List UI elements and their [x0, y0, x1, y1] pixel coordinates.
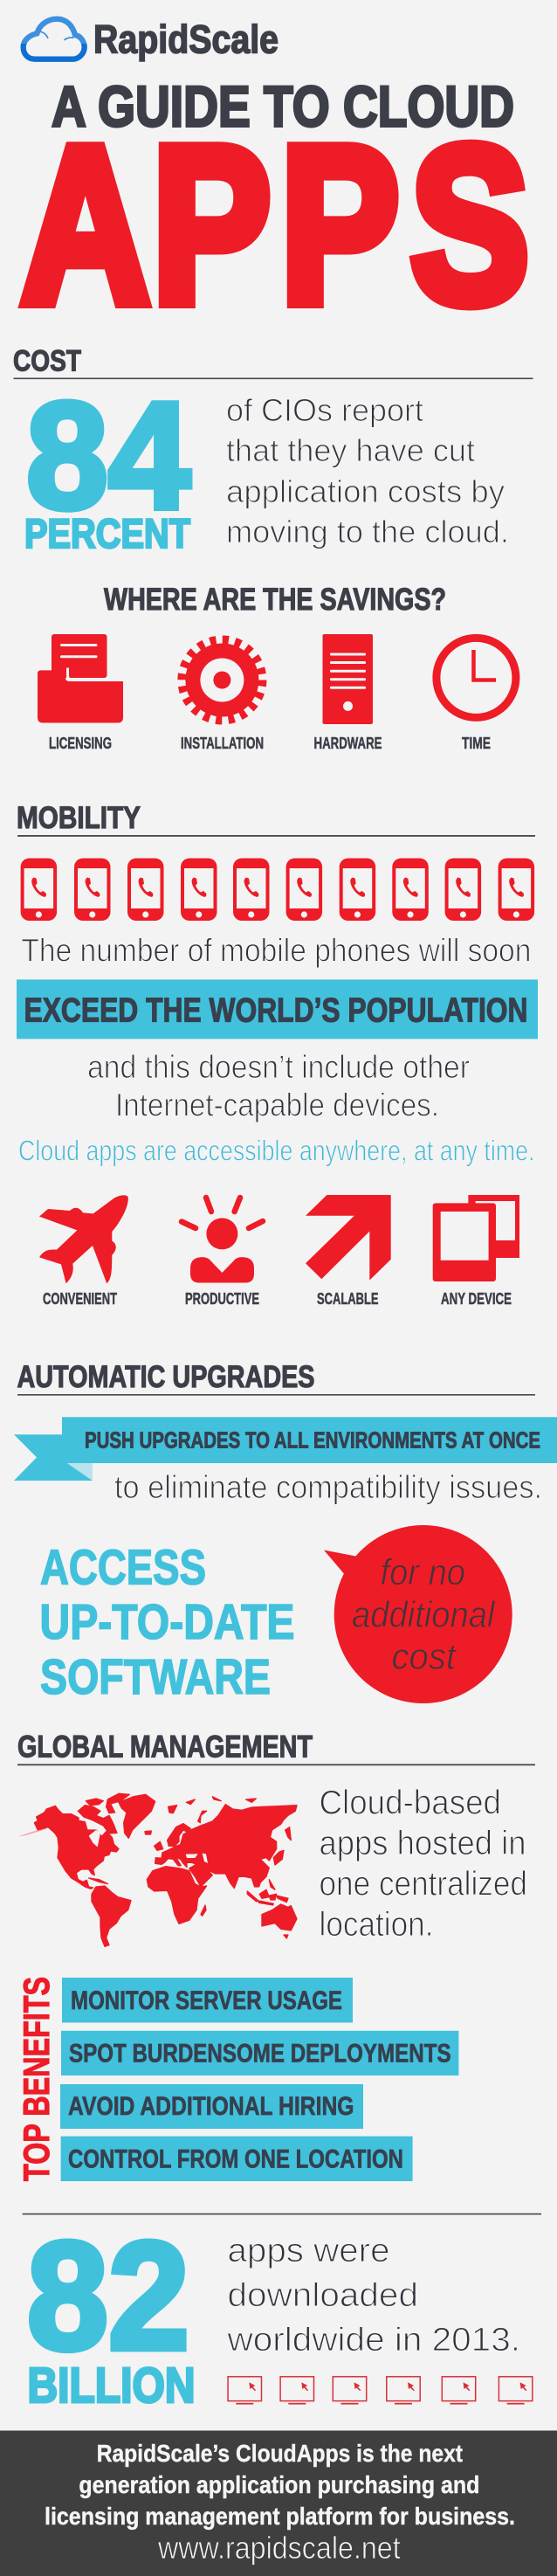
icon: clock	[437, 638, 516, 717]
heading: where are the savings: WHERE ARE THE SAVINGS?	[104, 583, 446, 617]
monitor icon row	[228, 2377, 533, 2405]
text: apps downloaded: worldwide in 2013.	[226, 2322, 520, 2358]
benefit: control from one location	[61, 2137, 413, 2181]
title: APPS: APPS	[21, 100, 529, 349]
callout: access up-to-date software: ACCESS	[40, 1539, 206, 1595]
text: apps downloaded: downloaded	[227, 2277, 418, 2314]
section heading: mobility: MOBILITY	[17, 801, 141, 835]
text block: CIO cost cuts: moving to the cloud.	[226, 514, 509, 549]
label: licensing: LICENSING	[49, 735, 112, 752]
section heading: global management: GLOBAL MANAGEMENT	[17, 1730, 313, 1765]
icon: cloud	[24, 19, 85, 59]
benefit: monitor server usage	[62, 1978, 353, 2023]
speech bubble: for no additional cost: additional	[352, 1593, 496, 1635]
world map	[17, 1793, 297, 1946]
benefit: spot burdensome deployments: SPOT BURDENSOME DEPLOYMENTS	[69, 2040, 451, 2068]
text block: CIO cost cuts: that they have cut	[226, 432, 475, 468]
speech bubble: for no additional cost	[324, 1525, 512, 1703]
footer panel: RapidScale’s CloudApps is the next	[97, 2440, 463, 2467]
section heading: cost: COST	[13, 344, 81, 377]
label: hardware: HARDWARE	[314, 735, 382, 752]
label: convenient: CONVENIENT	[43, 1290, 117, 1308]
text: cloud-based apps	[320, 1785, 527, 1944]
callout: access up-to-date software	[40, 1539, 295, 1705]
callout: access up-to-date software: SOFTWARE	[40, 1649, 271, 1705]
vertical heading: top benefits: TOP BENEFITS	[16, 1977, 57, 2181]
icon: installation gear	[182, 641, 261, 720]
section heading: automatic upgrades: AUTOMATIC UPGRADES	[17, 1360, 314, 1394]
icon: any device	[433, 1195, 519, 1281]
footer panel: generation application purchasing and	[79, 2471, 479, 2498]
speech bubble: for no additional cost: cost	[391, 1636, 457, 1677]
text: apps downloaded: apps were	[227, 2233, 389, 2269]
benefit: control from one location: CONTROL FROM ONE LOCATION	[68, 2144, 403, 2173]
benefit: avoid additional hiring	[60, 2084, 363, 2129]
icon: licensing folder	[38, 634, 123, 723]
text: other devices	[87, 1049, 470, 1123]
benefit: spot burdensome deployments	[61, 2031, 458, 2075]
callout: access up-to-date software: UP-TO-DATE	[40, 1594, 295, 1650]
stat: 82 billion: BILLION	[28, 2358, 196, 2414]
label: time: TIME	[462, 735, 491, 752]
stat: 84 percent: PERCENT	[24, 510, 190, 556]
banner: exceed the world's population	[17, 979, 538, 1039]
logo wordmark: RapidScale	[93, 17, 278, 61]
icon: productive person	[182, 1198, 263, 1282]
text: other devices: and this doesn’t include other	[87, 1049, 470, 1085]
text: cloud-based apps: one centralized	[320, 1866, 527, 1903]
label: productive: PRODUCTIVE	[185, 1290, 259, 1308]
text block: CIO cost cuts: application costs by	[226, 473, 505, 509]
text block: CIO cost cuts: of CIOs report	[226, 392, 423, 428]
icon: scalable arrow	[306, 1195, 391, 1281]
icon: hardware tower	[323, 634, 373, 724]
label: scalable: SCALABLE	[317, 1290, 379, 1308]
footer panel: www.rapidscale.net	[157, 2530, 401, 2566]
stat: 84 percent: 84	[26, 370, 190, 540]
text: cloud-based apps: Cloud-based	[320, 1785, 501, 1822]
text: cloud-based apps: location.	[320, 1906, 433, 1944]
ribbon: push upgrades	[14, 1417, 557, 1481]
logo: RapidScale	[24, 17, 278, 61]
benefit: avoid additional hiring: AVOID ADDITIONAL HIRING	[68, 2092, 354, 2121]
phone icon row	[21, 858, 534, 921]
icon: airplane	[39, 1195, 128, 1283]
footer panel	[0, 2430, 557, 2576]
text: apps downloaded	[226, 2233, 520, 2358]
label: installation: INSTALLATION	[181, 735, 264, 752]
speech bubble: for no additional cost: for no	[381, 1551, 465, 1592]
text: other devices: Internet-capable devices.	[115, 1087, 439, 1123]
label: any device: ANY DEVICE	[441, 1290, 512, 1308]
text block: CIO cost cuts	[226, 392, 509, 549]
benefit: monitor server usage: MONITOR SERVER USAGE	[71, 1986, 342, 2015]
stat: 82 billion: 82	[27, 2211, 189, 2382]
text: cloud-based apps: apps hosted in	[320, 1825, 526, 1862]
footer panel: licensing management platform for business.	[45, 2503, 515, 2530]
